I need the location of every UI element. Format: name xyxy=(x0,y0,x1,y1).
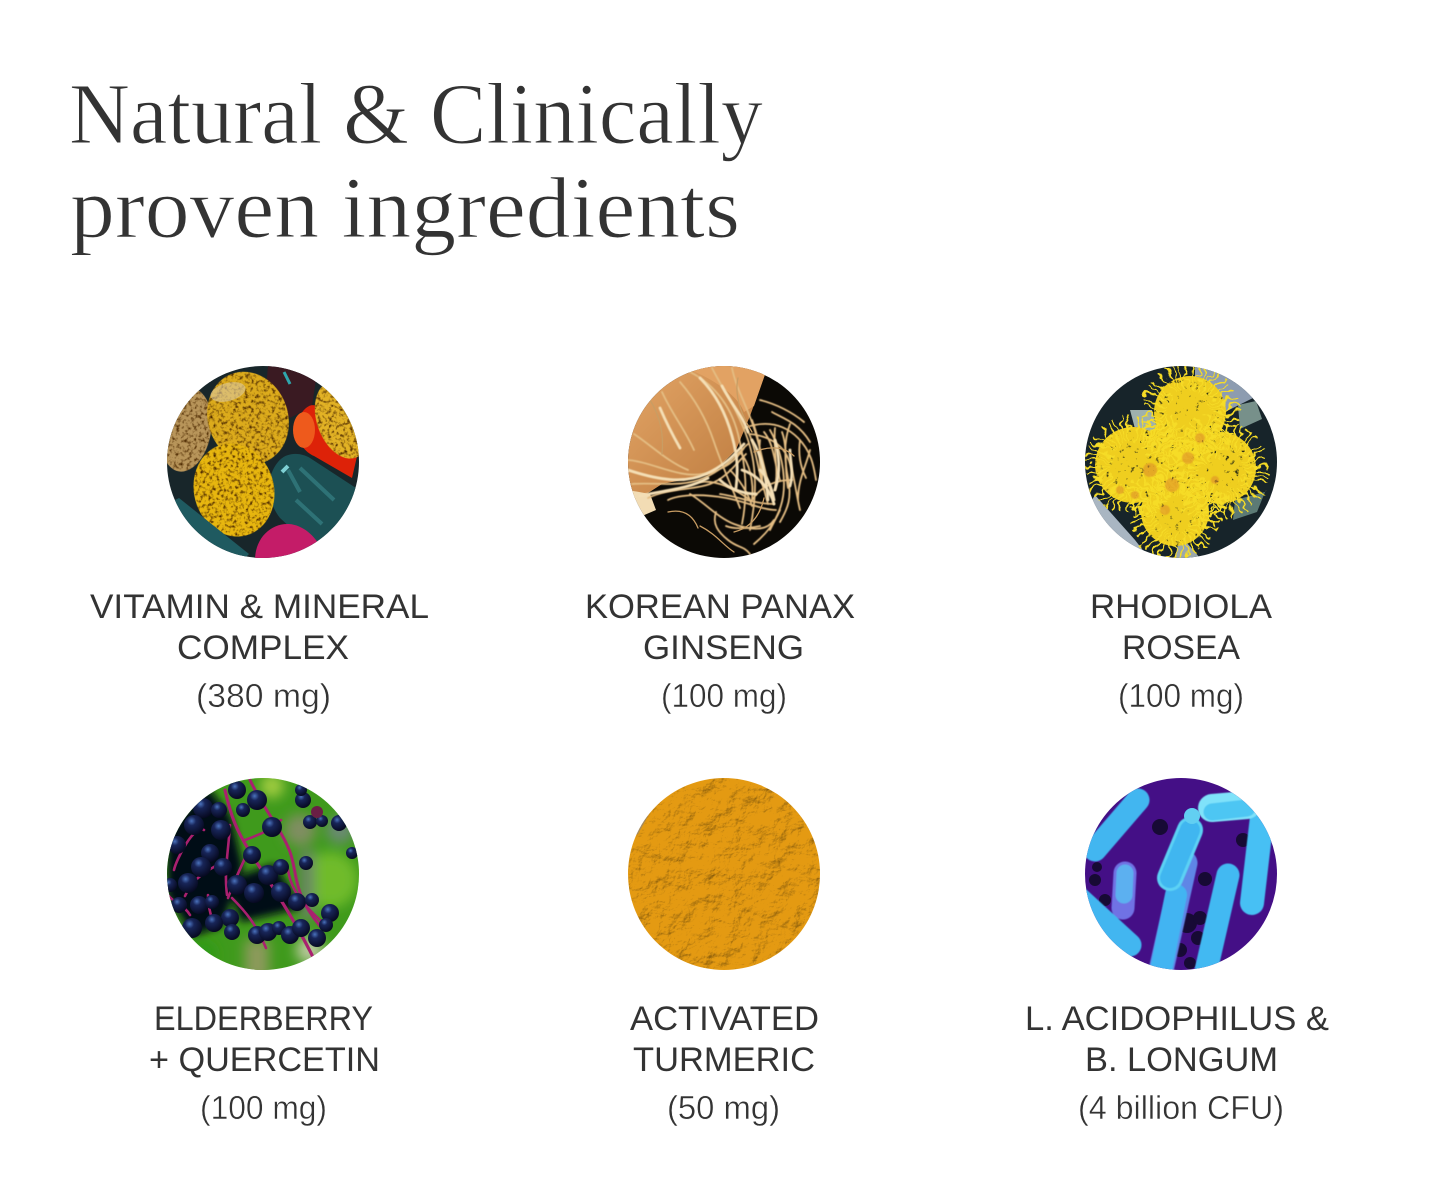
label: korean panax ginseng: (100 mg) xyxy=(661,677,787,714)
label: activated turmeric xyxy=(630,1000,819,1126)
label: activated turmeric: ACTIVATED xyxy=(630,1000,819,1038)
title xyxy=(69,65,763,256)
label: rhodiola rosea: ROSEA xyxy=(1122,629,1240,667)
label: vitamin and mineral complex: VITAMIN & MINERAL xyxy=(90,588,429,626)
panel: activated turmeric xyxy=(628,778,820,1126)
label: rhodiola rosea xyxy=(1090,588,1272,714)
label: l. acidophilus and b. longum: B. LONGUM xyxy=(1085,1041,1278,1079)
panel: elderberry and quercetin xyxy=(149,774,380,1126)
label: rhodiola rosea: RHODIOLA xyxy=(1090,588,1272,626)
title: Natural & Clinically xyxy=(69,65,763,162)
label: vitamin and mineral complex: (380 mg) xyxy=(196,677,331,714)
panel: korean panax ginseng xyxy=(585,366,855,714)
icon: vitamin pills photo xyxy=(167,366,359,558)
icon: rhodiola flower photo xyxy=(1081,366,1277,558)
label: l. acidophilus and b. longum: L. ACIDOPHILUS & xyxy=(1025,1000,1329,1038)
panel: l. acidophilus and b. longum xyxy=(1025,778,1329,1126)
panel: rhodiola rosea xyxy=(1081,366,1277,714)
label: elderberry and quercetin xyxy=(149,1000,380,1126)
label: elderberry and quercetin: ELDERBERRY xyxy=(154,1000,373,1038)
label: korean panax ginseng: GINSENG xyxy=(643,629,804,667)
label: activated turmeric: TURMERIC xyxy=(633,1041,815,1079)
label: vitamin and mineral complex: COMPLEX xyxy=(177,629,349,667)
label: l. acidophilus and b. longum: (4 billion CFU) xyxy=(1078,1089,1284,1126)
label: vitamin and mineral complex xyxy=(90,588,429,714)
icon: turmeric powder photo xyxy=(628,778,820,970)
icon: probiotic bacteria micrograph xyxy=(1070,778,1277,975)
label: activated turmeric: (50 mg) xyxy=(667,1089,780,1126)
label: elderberry and quercetin: + QUERCETIN xyxy=(149,1041,380,1079)
label: rhodiola rosea: (100 mg) xyxy=(1118,677,1244,714)
label: l. acidophilus and b. longum xyxy=(1025,1000,1329,1126)
icon: elderberries photo xyxy=(163,774,359,980)
label: korean panax ginseng: KOREAN PANAX xyxy=(585,588,855,626)
panel: vitamin and mineral complex xyxy=(90,360,429,714)
label: korean panax ginseng xyxy=(585,588,855,714)
label: elderberry and quercetin: (100 mg) xyxy=(200,1089,327,1126)
title: proven ingredients xyxy=(70,159,740,256)
icon: ginseng root photo xyxy=(628,366,820,558)
